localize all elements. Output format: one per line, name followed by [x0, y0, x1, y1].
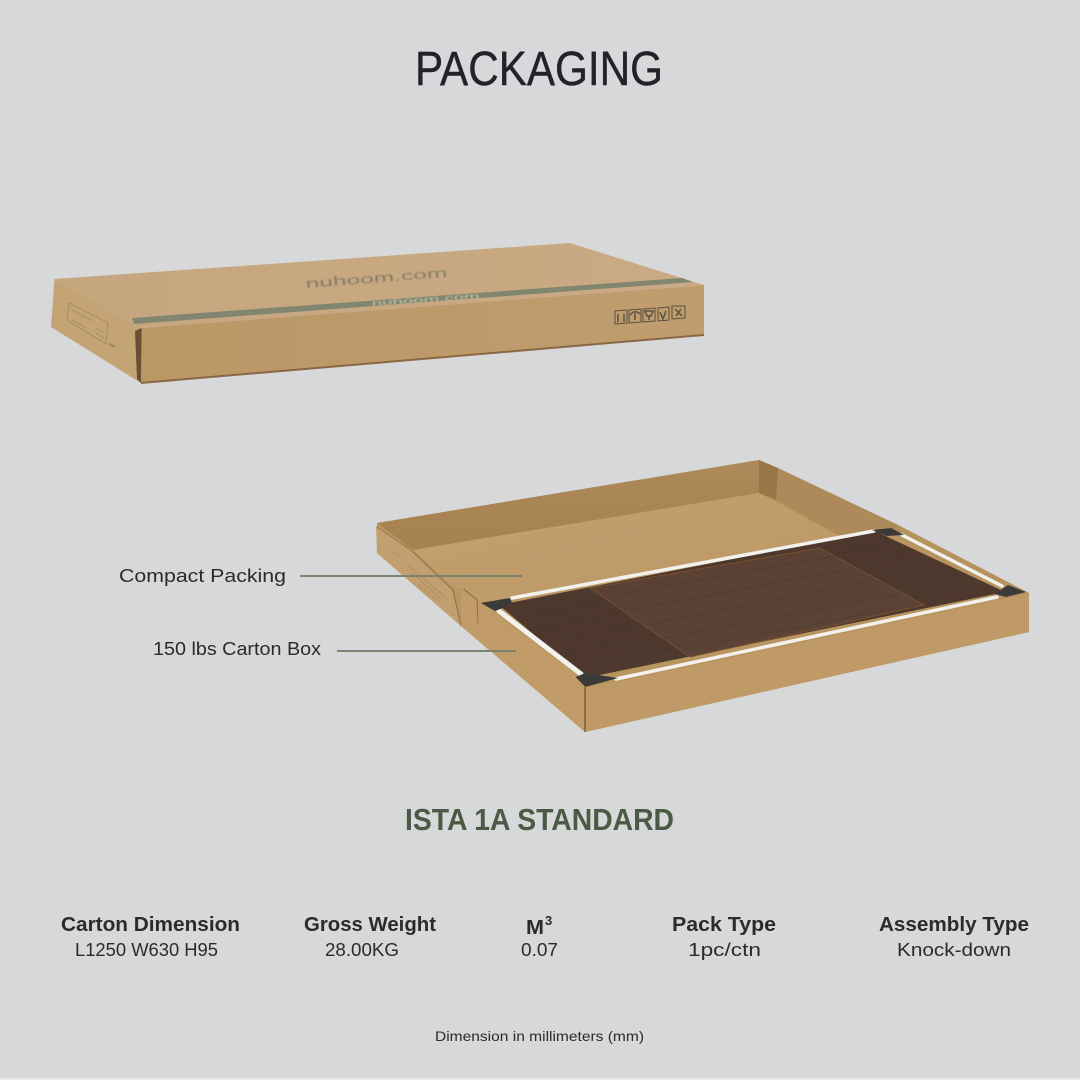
front wall	[585, 593, 1029, 732]
white foam bars	[499, 531, 1002, 679]
top sheet grain	[610, 556, 915, 650]
spec: carton dimension: Carton Dimension	[61, 914, 240, 936]
left folded flap	[376, 526, 461, 626]
green tape stripe	[132, 278, 693, 324]
bottom strip	[0, 1078, 1080, 1080]
spec: pack type: 1pc/ctn	[688, 940, 761, 960]
spec: volume: 0.07	[521, 940, 558, 960]
spec: assembly type: Assembly Type	[879, 914, 1029, 936]
callout: compact packing: Compact Packing	[119, 566, 286, 586]
printed logo on top: nuhoom.com	[305, 265, 448, 291]
right rim	[898, 525, 1029, 600]
open carton box	[376, 460, 1029, 732]
spec: gross weight	[304, 914, 436, 960]
box front face	[141, 285, 704, 383]
back wall inside	[377, 460, 759, 550]
title: PACKAGING	[415, 43, 663, 96]
printed logo on tape: nuhoom.com	[372, 291, 481, 308]
handling icons	[615, 306, 685, 324]
spec: volume	[521, 913, 558, 960]
printed side label	[67, 303, 115, 347]
closed carton box	[51, 243, 704, 384]
left front wall	[461, 590, 585, 732]
spec: volume: M	[526, 917, 544, 939]
spec: gross weight: Gross Weight	[304, 914, 436, 936]
walnut panel	[499, 531, 1005, 678]
callout: 150 lbs carton box: 150 lbs Carton Box	[153, 639, 321, 659]
spec: carton dimension: L1250 W630 H95	[75, 940, 218, 960]
flap printed label	[390, 550, 446, 602]
box top face	[54, 243, 704, 328]
spec: pack type: Pack Type	[672, 914, 776, 936]
black corner protectors	[481, 528, 1026, 687]
spec: volume: 3	[545, 913, 552, 928]
box silhouette base	[377, 460, 1029, 732]
box flap seam	[135, 328, 142, 383]
spec: assembly type: Knock-down	[897, 940, 1011, 960]
walnut top sheet	[590, 548, 924, 657]
box left end	[51, 279, 142, 383]
spec: pack type	[672, 914, 776, 960]
wood grain	[515, 618, 516, 619]
spec: gross weight: 28.00KG	[325, 940, 399, 960]
carton floor	[413, 493, 840, 602]
right wall inside	[776, 468, 905, 536]
footnote: Dimension in millimeters (mm)	[435, 1028, 644, 1044]
standard heading: ISTA 1A STANDARD	[405, 802, 674, 837]
left front rim	[478, 600, 585, 700]
spec: carton dimension	[61, 914, 240, 960]
spec: assembly type	[879, 914, 1029, 960]
